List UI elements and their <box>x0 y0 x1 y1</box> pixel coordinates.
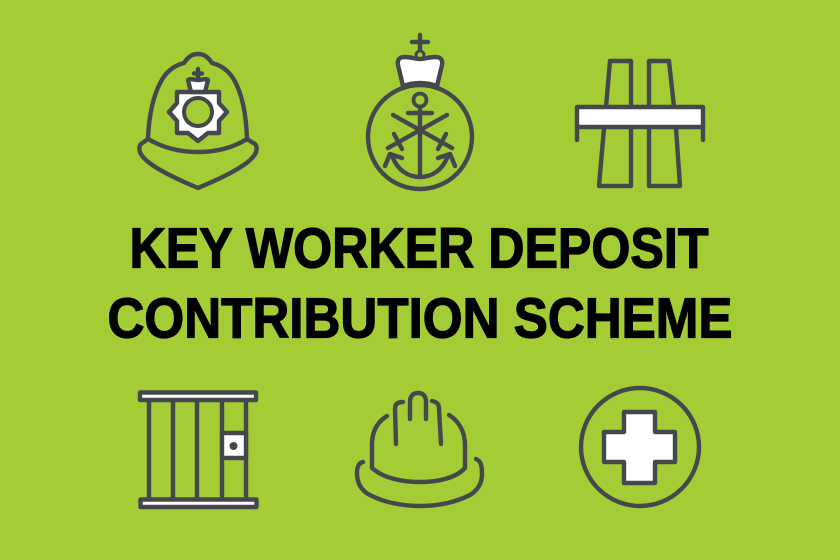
title: CONTRIBUTION SCHEME <box>108 286 732 350</box>
title: KEY WORKER DEPOSIT <box>130 216 709 280</box>
icon: hard hat <box>357 393 482 506</box>
icon: medical cross <box>581 388 699 506</box>
icon: motorway <box>577 61 703 186</box>
title <box>108 216 732 350</box>
icon: prison cell bars <box>140 392 256 507</box>
icon: navy anchor and crown <box>368 35 472 189</box>
icon: police helmet <box>139 54 257 188</box>
